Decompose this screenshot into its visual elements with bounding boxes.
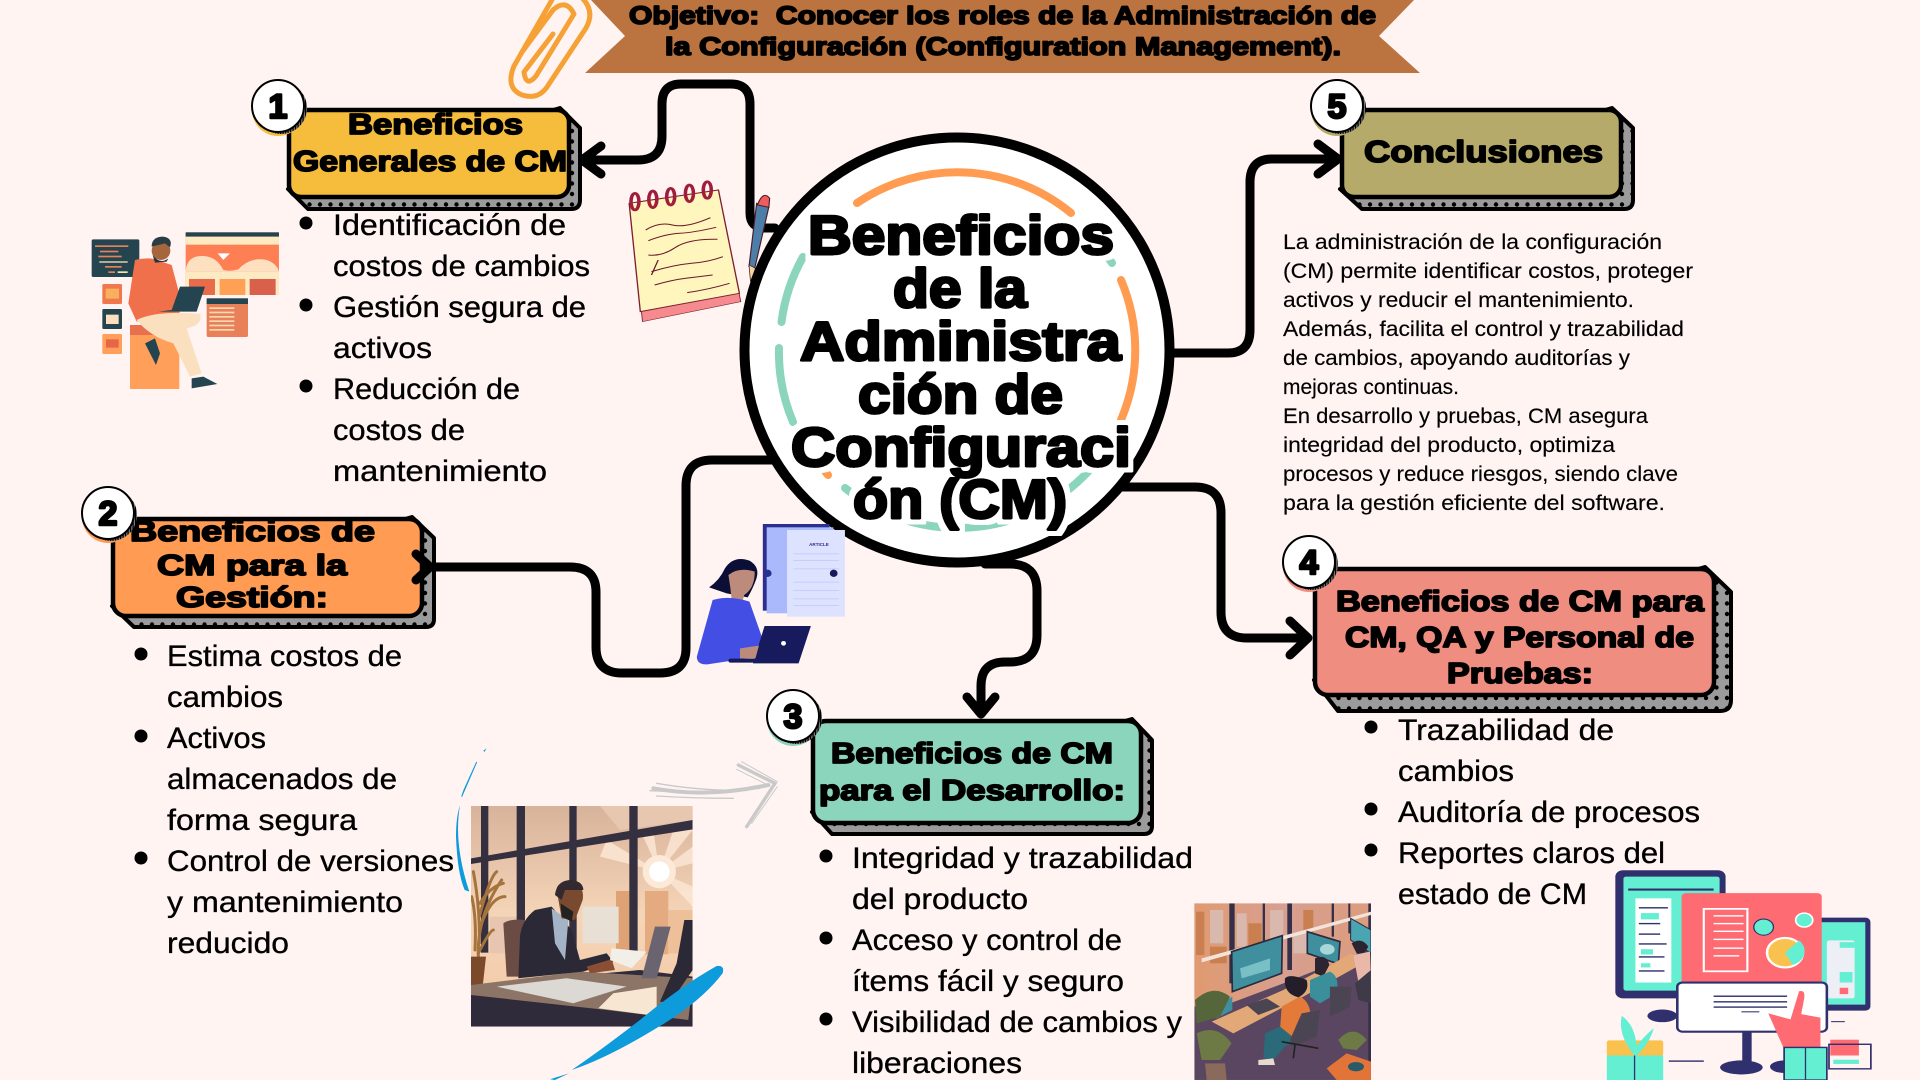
list: gestion: almacenados de	[167, 763, 397, 796]
box 3: desarrollo: para el Desarrollo:	[819, 775, 1125, 807]
list: gestion: y mantenimiento	[167, 886, 403, 919]
icon: hand drawn gray arrow	[650, 762, 777, 827]
decorative ring arcs	[779, 172, 1135, 528]
icon: notepad and pencil	[629, 182, 741, 322]
list: gestion: reducido	[167, 927, 289, 960]
list: gestion: Control de versiones	[167, 845, 454, 878]
box 4: CM QA pruebas	[1283, 536, 1731, 711]
box 3: desarrollo	[767, 690, 1152, 834]
badge 3	[767, 690, 822, 746]
list: gestion	[134, 640, 454, 960]
list: desarrollo: Acceso y control de	[852, 924, 1122, 957]
badge 3: 3	[784, 698, 802, 736]
center title: Configuraci	[791, 416, 1131, 478]
box 5: conclusiones	[1311, 80, 1633, 209]
illustration: developer with laptop	[92, 232, 279, 389]
connector: center to box 1	[582, 84, 775, 228]
title ribbon	[585, 0, 1420, 73]
conclusions text: procesos y reduce riesgos, siendo clave	[1283, 463, 1678, 486]
list: beneficios generales: costos de	[333, 414, 465, 447]
box 1: beneficios generales: Generales de CM	[293, 146, 567, 178]
list: CM QA pruebas: estado de CM	[1398, 878, 1587, 911]
box 5: conclusiones: Conclusiones	[1364, 134, 1603, 169]
badge 2: 2	[99, 495, 117, 533]
center title	[791, 204, 1131, 530]
list: desarrollo: Integridad y trazabilidad	[852, 842, 1193, 875]
center title: de la	[893, 257, 1027, 319]
list: desarrollo: Visibilidad de cambios y	[852, 1006, 1182, 1039]
conclusions text: (CM) permite identificar costos, proteger	[1283, 260, 1693, 283]
badge 5: 5	[1328, 88, 1346, 126]
photo: man working at desk	[471, 806, 693, 1027]
center circle	[744, 138, 1170, 562]
conclusions text: integridad del producto, optimiza	[1283, 434, 1615, 457]
badge 1: 1	[269, 88, 287, 126]
center title: ón (CM)	[853, 468, 1067, 530]
badge 5	[1311, 80, 1366, 136]
connector: center to box 2	[416, 460, 775, 673]
illustration: monitors and hand	[1607, 870, 1871, 1080]
list: gestion: forma segura	[167, 804, 357, 837]
box 2: gestion	[82, 487, 434, 627]
icon: pencil	[749, 195, 770, 282]
box 2: gestion: Gestión:	[176, 582, 328, 614]
list: CM QA pruebas: Auditoría de procesos	[1398, 796, 1700, 829]
badge 2	[82, 487, 137, 543]
illustration: woman with documents: ARTICLE	[809, 542, 829, 547]
list: desarrollo	[820, 842, 1193, 1080]
conclusions text	[1283, 231, 1693, 515]
box 1: beneficios generales: Beneficios	[348, 109, 523, 141]
icon: paperclip	[511, 0, 590, 96]
list: beneficios generales: Reducción de	[333, 373, 520, 406]
illustration: woman with documents	[697, 524, 845, 664]
box 3: desarrollo: Beneficios de CM	[831, 738, 1113, 770]
list: desarrollo: ítems fácil y seguro	[852, 965, 1124, 998]
center title: ción de	[858, 363, 1063, 425]
list: desarrollo: del producto	[852, 883, 1028, 916]
list: gestion: cambios	[167, 681, 283, 714]
center title: Administra	[800, 310, 1121, 372]
list: gestion: Activos	[167, 722, 266, 755]
conclusions text: mejoras continuas.	[1283, 376, 1459, 399]
conclusions text: En desarrollo y pruebas, CM asegura	[1283, 405, 1648, 428]
badge 4	[1283, 536, 1338, 592]
list: gestion: Estima costos de	[167, 640, 402, 673]
conclusions text: para la gestión eficiente del software.	[1283, 492, 1665, 515]
box 4: CM QA pruebas: Pruebas:	[1447, 658, 1593, 690]
list: beneficios generales: costos de cambios	[333, 250, 590, 283]
title ribbon: la Configuración (Configuration Management).	[665, 33, 1341, 61]
conclusions text: activos y reducir el mantenimiento.	[1283, 289, 1634, 312]
list: CM QA pruebas	[1364, 714, 1700, 911]
connector: center to box 3	[967, 564, 1037, 714]
conclusions text: Además, facilita el control y trazabilidad	[1283, 318, 1684, 341]
list: beneficios generales: Gestión segura de	[333, 291, 586, 324]
box 4: CM QA pruebas: CM, QA y Personal de	[1345, 622, 1694, 654]
list: beneficios generales: activos	[333, 332, 432, 365]
box 2: gestion: Beneficios de	[130, 516, 375, 548]
list: beneficios generales	[300, 209, 590, 488]
list: CM QA pruebas: Reportes claros del	[1398, 837, 1665, 870]
conclusions text: La administración de la configuración	[1283, 231, 1662, 254]
list: CM QA pruebas: cambios	[1398, 755, 1514, 788]
conclusions text: de cambios, apoyando auditorías y	[1283, 347, 1631, 370]
box 4: CM QA pruebas: Beneficios de CM para	[1336, 586, 1705, 618]
badge 4: 4	[1300, 544, 1319, 582]
box 2: gestion: CM para la	[157, 550, 348, 582]
list: CM QA pruebas: Trazabilidad de	[1398, 714, 1614, 747]
center title: Beneficios	[808, 204, 1114, 266]
list: desarrollo: liberaciones	[852, 1047, 1022, 1080]
decorative blue brush strokes	[456, 748, 723, 1080]
list: beneficios generales: Identificación de	[333, 209, 566, 242]
list: beneficios generales: mantenimiento	[333, 455, 547, 488]
box 1: beneficios generales	[252, 80, 580, 209]
connector: center to box 4	[1120, 487, 1308, 655]
badge 1	[252, 80, 307, 136]
title ribbon: Objetivo: Conocer los roles de la Administración de	[629, 2, 1376, 30]
photo: team at computers	[1194, 903, 1371, 1080]
connector: center to box 5	[1172, 144, 1338, 353]
